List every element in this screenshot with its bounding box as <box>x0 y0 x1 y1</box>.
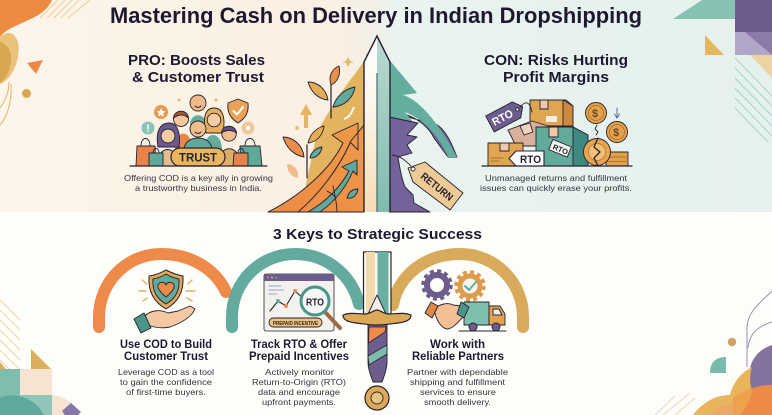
text: key 1 description: to gain the confidence <box>120 377 212 387</box>
icon: small leaf <box>347 189 358 198</box>
man <box>175 134 192 150</box>
decoration: top-right shapes <box>673 0 772 142</box>
text: key 2 heading: Prepaid Incentives <box>249 351 349 363</box>
text: key 1 heading: Customer Trust <box>124 351 208 363</box>
arrow: teal growth <box>308 160 357 212</box>
text: pro description: a trustworthy business in India. <box>135 183 262 193</box>
decoration: bottom-right shapes <box>655 291 772 415</box>
text: key 2 description: data and encourage <box>258 387 340 397</box>
text: pro description <box>124 173 273 193</box>
decoration: bottom-left shapes <box>0 300 81 415</box>
icon: dot <box>295 126 299 130</box>
panel: key 1 <box>99 254 226 397</box>
heading: con: Profit Margins <box>503 69 609 86</box>
text: con description: issues can quickly erase your profits. <box>480 183 632 193</box>
icon: gears, handshake and truck <box>423 271 506 331</box>
icon: small up arrow <box>300 104 312 128</box>
icon: faint sprout <box>287 164 298 178</box>
arc: orange <box>99 254 226 327</box>
text: key 1 heading <box>120 339 212 363</box>
icon: RTO dashboard and magnifier: PREPAID INCENTIVE <box>273 321 318 327</box>
text: key 3 description: Partner with dependable <box>407 367 508 377</box>
icon: small sprout <box>327 186 337 212</box>
blonde woman <box>204 135 222 150</box>
icon: return tag: RETURN <box>418 171 455 204</box>
icon: returned boxes and broken coins: RTO <box>490 108 516 129</box>
text: key 2 description: upfront payments. <box>262 397 336 407</box>
icon: returned boxes and broken coins: $ <box>592 108 598 120</box>
text: key 3 heading <box>412 339 504 363</box>
background: top panel <box>0 0 772 212</box>
icon: lower plant <box>283 126 324 178</box>
icon: returned boxes and broken coins: RTO <box>520 154 541 166</box>
right man <box>218 149 241 166</box>
top person <box>190 115 206 130</box>
text: key 3 description: shipping and fulfillment <box>410 377 506 387</box>
text: pro description: Offering COD is a key ally in growing <box>124 173 273 183</box>
icon: RTO dashboard and magnifier: RTO <box>306 296 324 308</box>
icon: returned boxes and broken coins: RTO <box>551 142 570 157</box>
text: key 3 description <box>407 367 508 407</box>
panel: pro <box>124 52 273 193</box>
centre man <box>184 138 212 150</box>
text: key 3 description: smooth delivery. <box>424 397 491 407</box>
icon: return tag <box>392 155 463 210</box>
text: key 1 description: of first-time buyers. <box>126 387 206 397</box>
panel: key 3 <box>393 254 523 407</box>
panel: key 2 <box>232 254 359 407</box>
sword blade: upper <box>364 36 390 212</box>
text: key 1 description <box>118 367 214 397</box>
panel: con <box>480 52 632 193</box>
text: key 1 description: Leverage COD as a tool <box>118 367 214 377</box>
heading: pro: & Customer Trust <box>132 69 264 86</box>
ground line <box>130 165 267 167</box>
text: key 2 description: Actively monitor <box>265 367 334 377</box>
text: key 2 description: Return-to-Origin (RTO) <box>252 377 346 387</box>
central illustration: torn risk side <box>387 57 463 212</box>
icon: returned boxes and broken coins <box>482 99 632 166</box>
icon: RTO dashboard and magnifier <box>264 274 340 331</box>
text: key 3 description: services to ensure <box>420 387 496 397</box>
arc: gold <box>393 254 523 327</box>
heading: 3 keys: 3 Keys to Strategic Success <box>273 226 482 243</box>
text: con description: Unmanaged returns and fulfillment <box>485 173 628 183</box>
arrow: stripe line <box>298 143 350 212</box>
central illustration: growth side <box>268 54 368 212</box>
icon: white swoosh <box>344 107 354 119</box>
left woman <box>157 150 179 166</box>
badge <box>171 148 225 166</box>
speech bubbles <box>154 105 168 119</box>
text: con description <box>480 173 632 193</box>
icon: returned boxes and broken coins: $ <box>613 127 619 139</box>
text: key 1 heading: Use COD to Build <box>120 339 212 351</box>
decoration: top-left shapes <box>0 0 90 125</box>
text: key 2 description <box>252 367 346 407</box>
icon: sparkle <box>342 57 354 67</box>
arc: teal <box>232 254 359 327</box>
icon: upper plant <box>308 66 355 118</box>
icon: customers with trust badge <box>130 95 267 166</box>
sword: lower blade, guard and handle <box>343 252 411 410</box>
heading: con <box>484 52 628 86</box>
text: key 2 heading <box>249 339 349 363</box>
bags <box>136 146 156 166</box>
heading: pro: PRO: Boosts Sales <box>128 52 265 69</box>
arrow: large orange growth <box>268 123 364 212</box>
gold backdrop <box>300 54 368 212</box>
heading: con: CON: Risks Hurting <box>484 52 628 69</box>
background: bottom panel <box>0 212 772 415</box>
text: key 2 heading: Track RTO & Offer <box>251 339 347 351</box>
title: Mastering Cash on Delivery in Indian Dropshipping <box>110 3 642 28</box>
heading: pro <box>128 52 265 86</box>
text: key 3 heading: Reliable Partners <box>412 351 504 363</box>
text: key 3 heading: Work with <box>430 339 485 351</box>
icon: shield and hand <box>134 270 195 333</box>
icon: customers with trust badge: TRUST <box>179 150 218 164</box>
shield <box>228 99 248 123</box>
